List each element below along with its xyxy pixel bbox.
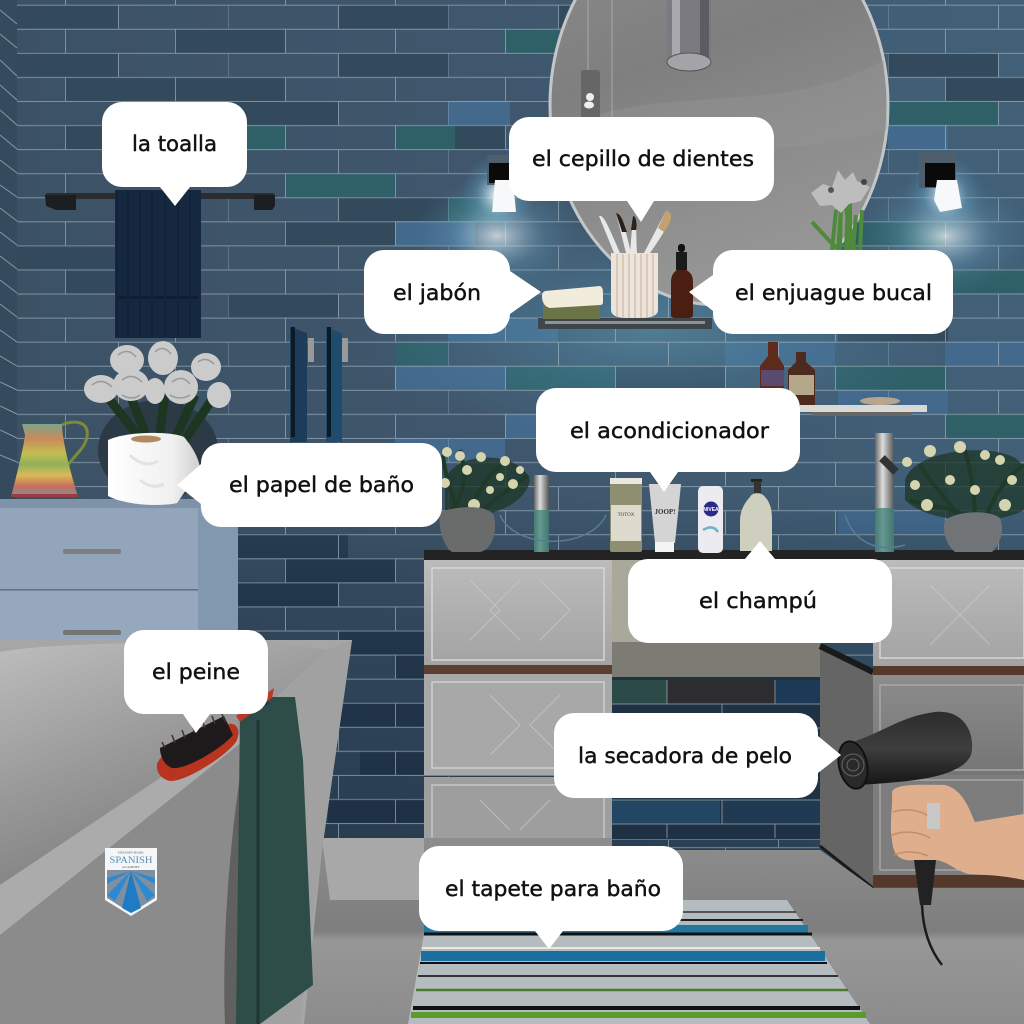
academy shield logo: SPANISH <box>110 855 153 865</box>
label: el tapete para baño <box>419 846 683 949</box>
right cabinet side <box>820 646 873 888</box>
academy shield logo <box>105 848 157 916</box>
towel bar with towel <box>45 190 275 338</box>
cream tube: JOOP! <box>654 508 676 516</box>
glass sink bowls <box>500 515 905 547</box>
recess with tiles <box>612 560 822 840</box>
left blue cabinet <box>0 499 238 649</box>
green towel on tub <box>236 697 313 1024</box>
striped bath mat <box>408 900 870 1024</box>
hand and arm <box>891 785 1024 880</box>
mirror flowers <box>811 170 870 250</box>
reflected wall light <box>581 0 612 122</box>
label: el jabón <box>364 250 541 334</box>
round mirror <box>550 0 888 305</box>
label: el cepillo de dientes <box>509 117 774 222</box>
blue label bottle: NIVEA <box>703 507 719 513</box>
label: el acondicionador: el acondicionador <box>570 419 769 444</box>
label: la secadora de pelo: la secadora de pelo <box>578 744 792 769</box>
academy shield logo: HUDSON HOOK <box>118 850 144 854</box>
label: el champú: el champú <box>699 589 817 614</box>
label: el acondicionador <box>536 388 800 492</box>
mouthwash dropper bottle <box>671 244 693 318</box>
jar <box>610 478 642 552</box>
glass shelf <box>538 318 712 329</box>
toilet paper roll <box>108 433 200 505</box>
label: el peine: el peine <box>152 660 240 685</box>
label: el tapete para baño: el tapete para baño <box>445 877 661 902</box>
hair dryer body <box>843 712 972 785</box>
label: la secadora de pelo <box>554 713 841 798</box>
shampoo pump bottle <box>740 479 772 551</box>
label: el peine <box>124 630 268 733</box>
left tulips and vase <box>440 447 530 552</box>
wall door handles <box>290 327 348 442</box>
mid glow on wall <box>350 220 950 440</box>
hair dryer with hand <box>834 712 1024 965</box>
label: el cepillo de dientes: el cepillo de dientes <box>532 147 754 172</box>
left drawers <box>424 558 612 665</box>
label: el champú <box>628 541 892 643</box>
academy shield logo: ACADEMY <box>122 865 140 869</box>
red hair brush <box>157 688 274 781</box>
vanity <box>424 550 1024 888</box>
floor <box>300 838 1024 1024</box>
left side wall <box>0 0 17 500</box>
label: el jabón: el jabón <box>393 281 481 306</box>
faucets <box>534 433 896 552</box>
label: el enjuague bucal: el enjuague bucal <box>735 281 932 306</box>
blue label bottle <box>698 486 723 553</box>
label: el enjuague bucal <box>689 250 953 334</box>
drawer pull <box>63 549 121 554</box>
jar: TOTOX <box>618 513 635 518</box>
rose bouquet <box>84 341 231 500</box>
counter top <box>424 550 1024 560</box>
soap bars <box>542 286 603 319</box>
label: el papel de baño <box>177 443 442 527</box>
right tulips and vase <box>902 441 1024 552</box>
small wall shelf with bottles <box>760 342 927 416</box>
label: el papel de baño: el papel de baño <box>229 473 414 498</box>
middle top rail <box>612 560 820 642</box>
cream tube <box>649 484 681 552</box>
label: la toalla <box>102 102 247 206</box>
reflected lamp <box>667 0 711 71</box>
toothbrush cup <box>599 211 671 318</box>
wall sconces <box>412 152 1024 295</box>
striped pitcher <box>11 422 87 497</box>
hair dryer cord <box>922 905 942 965</box>
bathtub <box>0 640 352 1024</box>
right drawers <box>873 558 1024 666</box>
label: la toalla: la toalla <box>132 132 217 157</box>
